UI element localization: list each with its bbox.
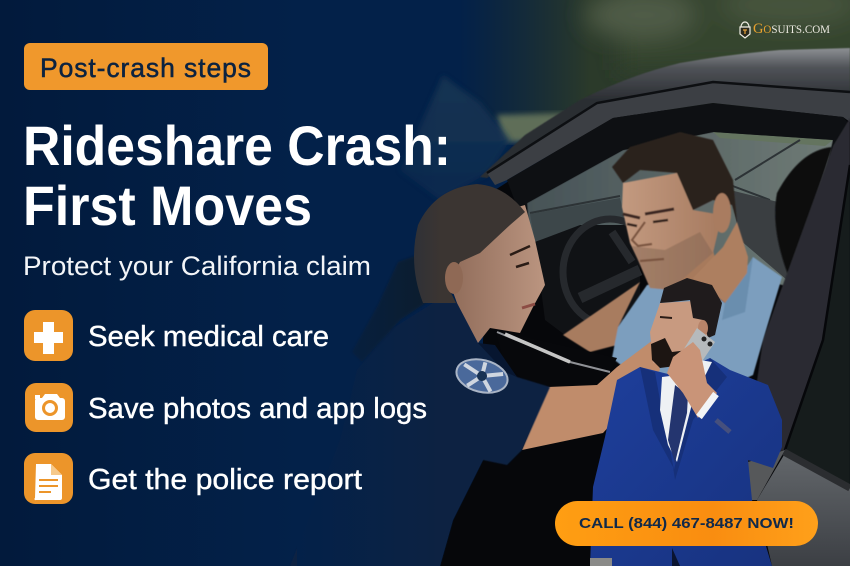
photo: dashboard bbox=[535, 225, 640, 345]
driver face bbox=[622, 173, 722, 290]
attorney face bbox=[650, 300, 712, 368]
title: First Moves bbox=[23, 174, 312, 237]
logo: GoSuits.com bbox=[740, 21, 830, 38]
driver shirt bbox=[612, 257, 782, 400]
driver neck bbox=[650, 250, 725, 300]
icon: camera bbox=[25, 383, 73, 432]
photo: blurred trees bbox=[460, 0, 850, 120]
photo: car seat headrest bbox=[775, 147, 832, 280]
badge: post-crash steps: Post-crash steps bbox=[40, 53, 251, 83]
person: attorney on phone bbox=[590, 278, 782, 566]
attorney suit bbox=[590, 358, 782, 566]
person: injured driver bbox=[563, 132, 782, 400]
photo: dark door panel bbox=[785, 165, 850, 485]
icon: medical cross bbox=[24, 310, 73, 361]
paramedic ponytail bbox=[352, 255, 430, 362]
step: get the police report bbox=[24, 453, 362, 504]
photo: blurred tree highlights bbox=[585, 0, 850, 70]
person: paramedic bbox=[290, 184, 660, 566]
attorney trouser gap bbox=[672, 548, 680, 566]
attorney watch bbox=[590, 558, 612, 566]
attorney ear bbox=[698, 320, 708, 336]
photo: inner black window frame bbox=[507, 103, 850, 215]
attorney shirt bbox=[660, 360, 712, 462]
photo: field strip bbox=[497, 113, 570, 142]
photo: door trim panel bbox=[530, 198, 625, 242]
title bbox=[23, 114, 451, 237]
driver stubble bbox=[632, 232, 713, 290]
icon: logo lock bbox=[740, 22, 750, 38]
photo: roof groove band bbox=[487, 82, 850, 185]
photo: car interior dark bbox=[440, 110, 850, 566]
photo: right door pillar bbox=[745, 118, 850, 462]
call to action button bbox=[555, 501, 818, 546]
attorney eye bbox=[660, 317, 672, 318]
paramedic arm bbox=[522, 340, 660, 450]
step: seek medical care: Seek medical care bbox=[88, 321, 329, 353]
attorney beard bbox=[651, 338, 688, 368]
driver nose and mouth bbox=[632, 222, 664, 261]
icon: sleeve patch bbox=[453, 354, 511, 398]
paramedic uniform bbox=[290, 303, 550, 566]
step: seek medical care bbox=[24, 310, 329, 361]
photo: lower door panel bbox=[757, 450, 850, 566]
driver arm bbox=[563, 282, 640, 352]
driver brows and eyes bbox=[623, 209, 674, 218]
icon: document bbox=[24, 453, 73, 504]
attorney lapels bbox=[640, 358, 727, 480]
photo: field seen through window bbox=[713, 132, 833, 146]
paramedic hair bbox=[414, 184, 525, 303]
attorney hand bbox=[667, 342, 717, 418]
step: save photos and app logs: Save photos and app logs bbox=[88, 393, 427, 425]
paramedic brow and eye bbox=[510, 246, 530, 267]
subtitle: Protect your California claim bbox=[23, 251, 371, 281]
driver hair bbox=[612, 132, 737, 222]
paramedic lips bbox=[522, 304, 535, 308]
photo: navy fade over left of photo bbox=[297, 0, 440, 566]
door sill bbox=[495, 330, 617, 392]
attorney shirt cuff bbox=[699, 394, 716, 417]
badge: post-crash steps bbox=[24, 43, 268, 90]
photo: glass dash lines bbox=[530, 140, 800, 213]
logo text: GOSUITS.COM bbox=[753, 21, 830, 37]
driver hand at neck bbox=[693, 222, 748, 303]
icon: phone bbox=[672, 328, 715, 372]
photo: car hood behind paramedic bbox=[400, 76, 510, 200]
paramedic neck and face bbox=[445, 205, 545, 343]
driver ear bbox=[713, 193, 731, 233]
call to action button: CALL (844) 467-8487 NOW! bbox=[579, 515, 794, 532]
attorney jacket buttons bbox=[716, 420, 730, 432]
title: Rideshare Crash: bbox=[23, 114, 451, 177]
attorney tie bbox=[668, 385, 688, 463]
photo: car roof bbox=[480, 48, 850, 178]
step: save photos and app logs bbox=[25, 383, 427, 432]
step: get the police report: Get the police report bbox=[88, 464, 362, 496]
attorney hair bbox=[660, 278, 722, 338]
photo: window glass bbox=[527, 132, 833, 290]
paramedic ear bbox=[445, 262, 463, 294]
icon: steering wheel bbox=[563, 219, 657, 325]
